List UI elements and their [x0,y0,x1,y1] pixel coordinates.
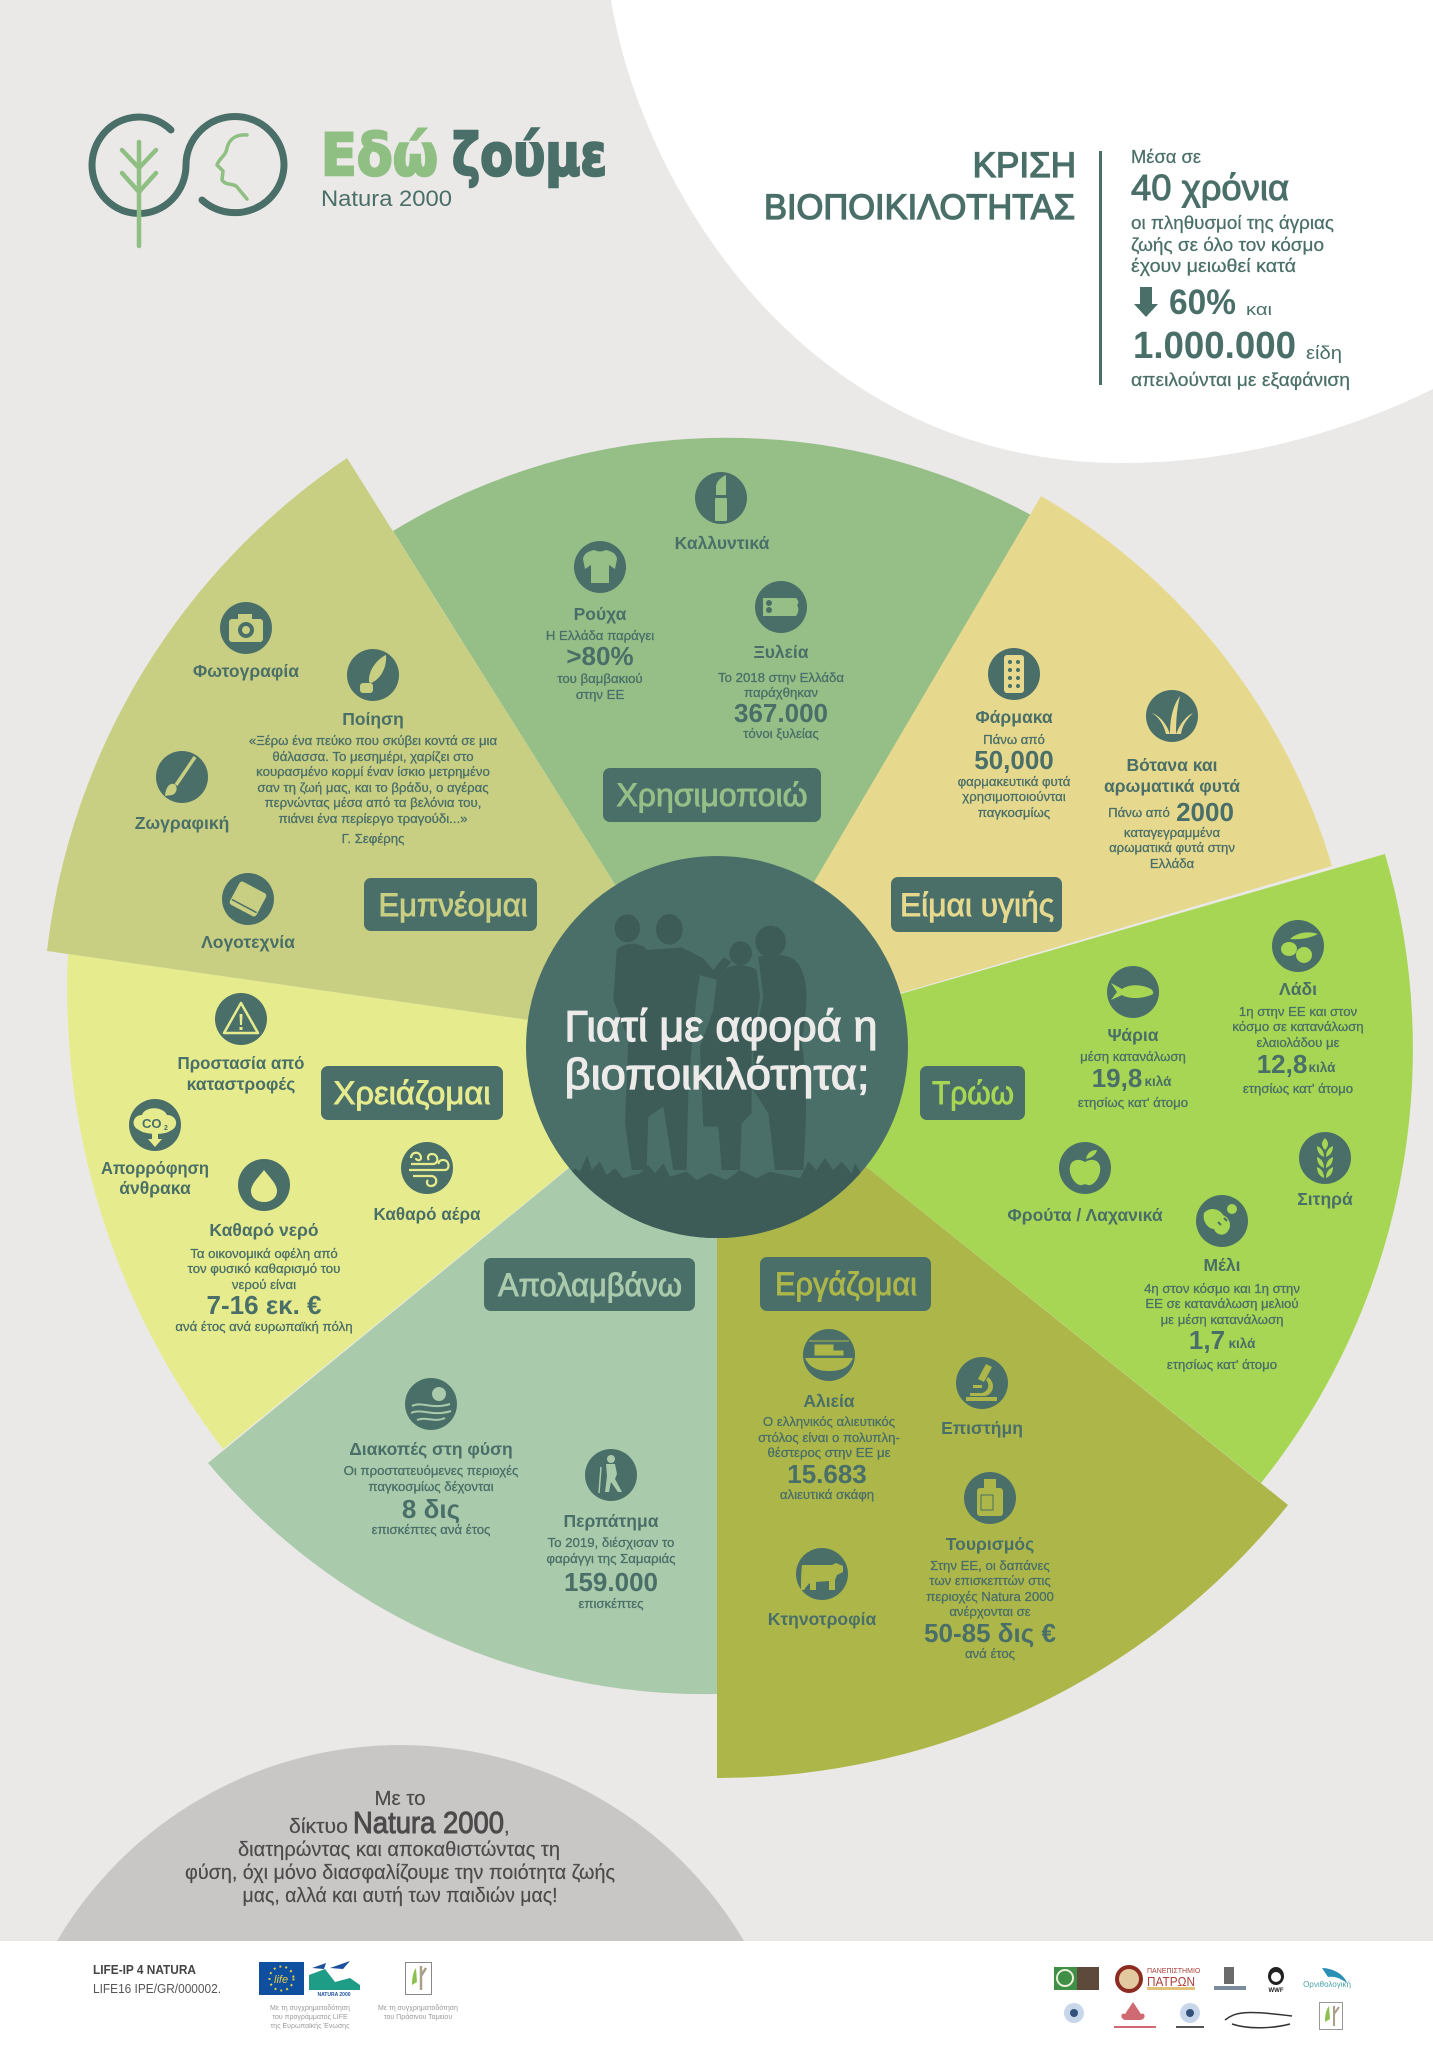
project code text: LIFE-IP 4 NATURA [93,1963,196,1977]
heading: Κρίση βιοποικιλότητας: ΚΡΙΣΗ [973,146,1076,185]
tab: Εργάζομαι: Εργάζομαι [775,1266,917,1302]
item: Καθαρό νερό: Τα οικονομικά οφέλη από [190,1246,338,1261]
item: Λάδι: ετησίως κατ' άτομο [1243,1081,1353,1096]
partner logos [1054,1967,1351,2030]
biodiversity crisis statistics: 1.000.000 [1133,325,1296,367]
logo: Εδώ ζούμε Natura 2000 [92,116,607,246]
item: Περπάτημα: επισκέπτες [578,1596,644,1611]
caption: LIFE co-funding: Με τη συγχρηματοδότηση [270,2004,350,2012]
item: Προστασία από καταστροφές [178,993,304,1094]
item: Σιτηρά [1297,1132,1353,1209]
bottom message panel [57,1745,744,1941]
panel: Χρησιμοποιώ [546,472,844,822]
item: Μέλι: Μέλι [1203,1255,1241,1275]
tab: Απολαμβάνω: Απολαμβάνω [498,1267,682,1303]
item: Επιστήμη [941,1357,1023,1438]
item: Καθαρό αέρα: Καθαρό αέρα [374,1204,481,1224]
item: Φάρμακα: Πάνω από [983,732,1045,747]
item: Φάρμακα [958,648,1071,820]
item: Ξυλεία: Ξυλεία [753,642,809,662]
item: Βότανα και αρωματικά φυτά: Πάνω από [1108,805,1170,820]
item: Λογοτεχνία [201,873,295,952]
panel: Τρώω [920,920,1364,1372]
item: Ξυλεία: παράχθηκαν [744,685,818,700]
tab: Απολαμβάνω [484,1258,695,1311]
item: Καθαρό νερό: ανά έτος ανά ευρωπαϊκή πόλη [175,1319,353,1334]
tab: Εμπνέομαι [364,878,537,931]
item: Μέλι: κιλά [1229,1336,1256,1351]
item: Τουρισμός: περιοχές Natura 2000 [926,1589,1054,1604]
item: Κτηνοτροφία: Κτηνοτροφία [768,1609,877,1629]
item: Λάδι: 12,8 [1257,1049,1307,1079]
bottom message panel: δίκτυο [289,1815,348,1838]
item: Ξυλεία: τόνοι ξυλείας [743,726,819,741]
item: Βότανα και αρωματικά φυτά: αρωματικά φυτά στην [1109,840,1235,855]
item: Αλιεία: θέστερος στην ΕΕ με [768,1445,891,1460]
bottom message panel: Με το [374,1787,426,1810]
item: Ποίηση with quote: περνώντας μέσα από τα βελόνια του, [265,795,481,810]
tab: Εμπνέομαι: Εμπνέομαι [378,887,528,923]
bottom message panel: διατηρώντας και αποκαθιστώντας τη [238,1838,560,1861]
item: Βότανα και αρωματικά φυτά: Ελλάδα [1150,856,1195,871]
partner logo: University of Patras: ΠΑΝΕΠΙΣΤΗΜΙΟ [1147,1968,1201,1975]
label: Καλλυντικά: Καλλυντικά [675,533,770,553]
item: Σιτηρά: Σιτηρά [1297,1189,1353,1209]
item: Καθαρό νερό [175,1159,353,1334]
item: Καθαρό νερό: Καθαρό νερό [209,1220,319,1240]
item: Φάρμακα: χρησιμοποιούνται [962,789,1066,804]
item: Ποίηση with quote: πιάνει ένα περίεργο τραγούδι...» [279,811,467,826]
item: Ρούχα: στην ΕΕ [576,687,624,702]
icon: lipstick [695,472,747,524]
sector shape: Εμπνέομαι [47,458,717,1047]
item: Μέλι: 4η στον κόσμο και 1η στην [1144,1281,1300,1296]
sector shape: Απολαμβάνω [208,1047,717,1694]
item: Διακοπές στη φύση: Οι προστατευόμενες περιοχές [344,1463,518,1478]
bottom message panel: Natura 2000 [353,1805,504,1840]
item: Καθαρό νερό: 7-16 εκ. € [206,1290,322,1320]
item: Απορρόφηση άνθρακα: άνθρακα [119,1178,191,1198]
logo: EU LIFE [259,1962,304,1995]
item: Βότανα και αρωματικά φυτά: αρωματικά φυτά [1104,776,1240,796]
partner logo: green square [1054,1967,1099,1990]
item: Λογοτεχνία: Λογοτεχνία [201,932,295,952]
caption: LIFE co-funding [270,2004,350,2030]
item: Καθαρό νερό: τον φυσικό καθαρισμό του [188,1261,340,1276]
footer [0,1941,1433,2048]
sector shape: Χρειάζομαι [67,954,717,1449]
item: Φωτογραφία [193,602,299,681]
item: Ψάρια [1078,966,1188,1110]
item: Απορρόφηση άνθρακα: Απορρόφηση [101,1158,209,1178]
partner logo: WWF: WWF [1268,1988,1284,1994]
item: Αλιεία: αλιευτικά σκάφη [780,1487,874,1502]
item: Ρούχα: Ρούχα [574,604,627,624]
item: Ξυλεία: Το 2018 στην Ελλάδα [718,670,844,685]
logo mark: loops, tree and face [92,116,284,246]
item: Φάρμακα: φαρμακευτικά φυτά [958,774,1071,789]
item: Ξυλεία: 367.000 [734,698,828,728]
partner logo: Ornithologiki: Ορνιθολογική [1303,1980,1351,1989]
heading: Κρίση βιοποικιλότητας [764,146,1076,227]
item: Περπάτημα: Το 2019, διέσχισαν το [548,1535,674,1550]
item: Λάδι: κιλά [1309,1060,1336,1075]
item: Ξυλεία [718,581,844,741]
logo: EU LIFE: life [274,1974,288,1986]
item: Βότανα και αρωματικά φυτά: Βότανα και [1126,755,1218,775]
item: Ποίηση with quote: θάλασσα. Το μεσημέρι, χαρίζει στο [272,749,474,764]
item: Βότανα και αρωματικά φυτά: 2000 [1176,797,1234,827]
item: Αλιεία: 15.683 [787,1459,867,1489]
item: Τουρισμός [924,1472,1056,1661]
biodiversity crisis statistics: και [1246,300,1272,319]
white header blob [611,0,1433,463]
partner logo: Ornithologiki [1303,1968,1351,1989]
tab: Χρησιμοποιώ [603,768,821,822]
project code text: LIFE16 IPE/GR/000002. [93,1982,221,1996]
biodiversity crisis statistics: απειλούνται με εξαφάνιση [1131,370,1350,390]
item: Μέλι: ΕΕ σε κατανάλωση μελιού [1145,1296,1299,1311]
sector shape: Είμαι υγιής [717,496,1332,1047]
item: Μέλι: 1,7 [1189,1325,1225,1355]
item: Ζωγραφική: Ζωγραφική [135,813,229,833]
item: Απορρόφηση άνθρακα: 2 [164,1125,168,1132]
item: Ποίηση with quote: Ποίηση [342,709,404,729]
caption: LIFE co-funding: της Ευρωπαϊκής Ένωσης [271,2023,350,2030]
tab: Τρώω [920,1066,1025,1120]
bottom message panel: μας, αλλά και αυτή των παιδιών μας! [242,1884,558,1907]
tab: Χρειάζομαι [321,1066,503,1120]
item: Φωτογραφία: Φωτογραφία [193,661,299,681]
item: Διακοπές στη φύση [344,1378,518,1537]
partner logo: University of Patras: ΠΑΤΡΩΝ [1147,1974,1195,1989]
item: Λάδι: ελαιολάδου με [1257,1035,1340,1050]
bottom message panel: , [504,1815,510,1838]
logo: Natura 2000: NATURA 2000 [317,1992,351,1998]
item: Διακοπές στη φύση: Διακοπές στη φύση [349,1439,513,1459]
bottom message panel: φύση, όχι μόνο διασφαλίζουμε την ποιότητα ζωής [185,1861,615,1884]
item: Μέλι: με μέση κατανάλωση [1161,1312,1283,1327]
biodiversity crisis statistics: έχουν μειωθεί κατά [1131,256,1296,276]
item: Αλιεία: Αλιεία [803,1391,855,1411]
item: Τουρισμός: των επισκεπτών στις [929,1573,1051,1588]
item: Ποίηση with quote: κουρασμένο κορμί έναν ίσκιο μετρημένο [256,764,490,779]
partner logo: museum [1214,1967,1246,1990]
biodiversity crisis statistics: Μέσα σε [1131,147,1201,167]
biodiversity crisis statistics [1131,147,1350,390]
item: Περπάτημα: φαράγγι της Σαμαριάς [546,1551,676,1566]
central circle [526,856,908,1238]
item: Βότανα και αρωματικά φυτά: καταγεγραμμένα [1124,825,1220,840]
panel: Είμαι υγιής [891,648,1240,932]
panel: Εργάζομαι [758,1257,1056,1661]
caption: Green Fund co-funding: του Πράσινου Ταμείου [384,2013,452,2021]
item: Ψάρια: μέση κατανάλωση [1080,1049,1186,1064]
item: Αλιεία: στόλος είναι ο πολυπλη- [758,1430,900,1445]
item: Ψάρια: 19,8 [1092,1063,1142,1093]
item: Ψάρια: Ψάρια [1107,1025,1159,1045]
item: Λάδι: Λάδι [1279,979,1317,999]
item: Μέλι [1144,1195,1300,1372]
biodiversity crisis statistics: 40 χρόνια [1131,167,1289,208]
item: Φρούτα / Λαχανικά: Φρούτα / Λαχανικά [1007,1205,1163,1225]
caption: LIFE co-funding: του προγράμματος LIFE [272,2013,348,2021]
heading: Κρίση βιοποικιλότητας: ΒΙΟΠΟΙΚΙΛΟΤΗΤΑΣ [764,188,1075,227]
item: Τουρισμός: Στην ΕΕ, οι δαπάνες [930,1558,1050,1573]
item: Ζωγραφική [135,751,229,833]
item: Προστασία από καταστροφές: καταστροφές [187,1074,295,1094]
item: Φρούτα / Λαχανικά [1007,1142,1163,1225]
item: Ψάρια: ετησίως κατ' άτομο [1078,1095,1188,1110]
logo: Natura 2000 [309,1961,360,1998]
item: Ποίηση with quote: Γ. Σεφέρης [342,831,404,846]
item: Περπάτημα: Περπάτημα [564,1511,659,1531]
partner logo: black wave [1225,2013,1292,2028]
item: Ψάρια: κιλά [1145,1074,1172,1089]
item: Τουρισμός: ανέρχονται σε [949,1604,1031,1619]
item: Ποίηση with quote [249,649,497,846]
tab: Χρησιμοποιώ: Χρησιμοποιώ [616,777,808,813]
item: Καθαρό αέρα [374,1142,481,1224]
item: Ρούχα: >80% [566,641,634,671]
biodiversity crisis statistics: είδη [1306,343,1342,363]
item: Προστασία από καταστροφές: Προστασία από [178,1053,304,1073]
project code text [93,1963,221,1996]
item: Διακοπές στη φύση: παγκοσμίως δέχονται [368,1479,494,1494]
caption: Green Fund co-funding [378,2004,458,2021]
tab: Είμαι υγιής [891,877,1062,932]
item: Ποίηση with quote: σαν τη ζωή μας, και το βράδυ, ο αγέρας [257,780,489,795]
sector shape: Εργάζομαι [717,1047,1288,1778]
biodiversity crisis statistics: ζωής σε όλο τον κόσμο [1131,235,1324,255]
logo text: ζούμε: ζούμε [452,121,607,189]
item: Τουρισμός: Τουρισμός [946,1534,1034,1554]
item: Αλιεία: Ο ελληνικός αλιευτικός [763,1414,895,1429]
icon: down arrow [1134,287,1158,317]
item: Διακοπές στη φύση: επισκέπτες ανά έτος [372,1522,490,1537]
item: Ρούχα: του βαμβακιού [557,671,643,686]
item: Επιστήμη: Επιστήμη [941,1418,1023,1438]
tab: Είμαι υγιής: Είμαι υγιής [900,887,1054,923]
item: Ρούχα: Η Ελλάδα παράγει [546,628,654,643]
tab: Εργάζομαι [760,1257,931,1311]
partner logo: red ornament [1114,2002,1156,2028]
caption: Green Fund co-funding: Με τη συγχρηματοδότηση [378,2004,458,2012]
partner logo: WWF [1268,1967,1284,1994]
item: Φάρμακα: 50,000 [974,745,1054,775]
item: Αλιεία [758,1329,900,1502]
logo: Green Fund [406,1962,432,1994]
divider line [1099,151,1102,385]
item: Ποίηση with quote: «Ξέρω ένα πεύκο που σκύβει κοντά σε μια [249,733,497,748]
item: Κτηνοτροφία [768,1548,877,1629]
item: Απορρόφηση άνθρακα: CO [142,1116,162,1131]
item: Μέλι: ετησίως κατ' άτομο [1167,1357,1277,1372]
item: Φάρμακα: παγκοσμίως [978,805,1050,820]
item: Λάδι: κόσμο σε κατανάλωση [1232,1019,1364,1034]
item: Λάδι: 1η στην ΕΕ και στον [1239,1004,1358,1019]
tab: Χρειάζομαι: Χρειάζομαι [334,1075,490,1111]
item: Ρούχα [546,541,654,702]
biodiversity crisis statistics: οι πληθυσμοί της άγριας [1131,213,1334,233]
item: Απορρόφηση άνθρακα [101,1099,209,1198]
item: Περπάτημα [546,1449,676,1611]
logo text: Natura 2000: Natura 2000 [321,186,452,211]
item: Λάδι [1232,920,1364,1096]
partner logo: seal two [1176,2003,1204,2028]
family silhouette [572,914,861,1238]
sector shape: Τρώω [717,854,1413,1483]
tab: Τρώω: Τρώω [932,1075,1014,1111]
panel: Εμπνέομαι [135,602,537,952]
logo text: Εδώ: Εδώ [321,121,438,189]
item: Διακοπές στη φύση: 8 δις [402,1494,460,1524]
item: Τουρισμός: ανά έτος [965,1646,1015,1661]
item: Τουρισμός: 50-85 δις € [924,1618,1056,1648]
item: Φάρμακα: Φάρμακα [975,707,1053,727]
central question: Γιατί με αφορά η [564,1002,878,1051]
item: Καθαρό νερό: νερού είναι [232,1277,296,1292]
partner logo: seal one [1064,2003,1084,2023]
biodiversity crisis statistics: 60% [1169,283,1236,322]
central circle: βιοποικιλότητα; [564,1050,870,1099]
partner logo: Green Fund small [1320,2002,1342,2030]
panel: Απολαμβάνω [344,1258,695,1611]
panel: Χρειάζομαι [101,993,503,1334]
partner logo: University of Patras [1117,1967,1201,1991]
item: Περπάτημα: 159.000 [564,1567,658,1597]
sector shape: Χρησιμοποιώ [393,438,1031,1047]
item: Βότανα και αρωματικά φυτά [1104,690,1240,871]
